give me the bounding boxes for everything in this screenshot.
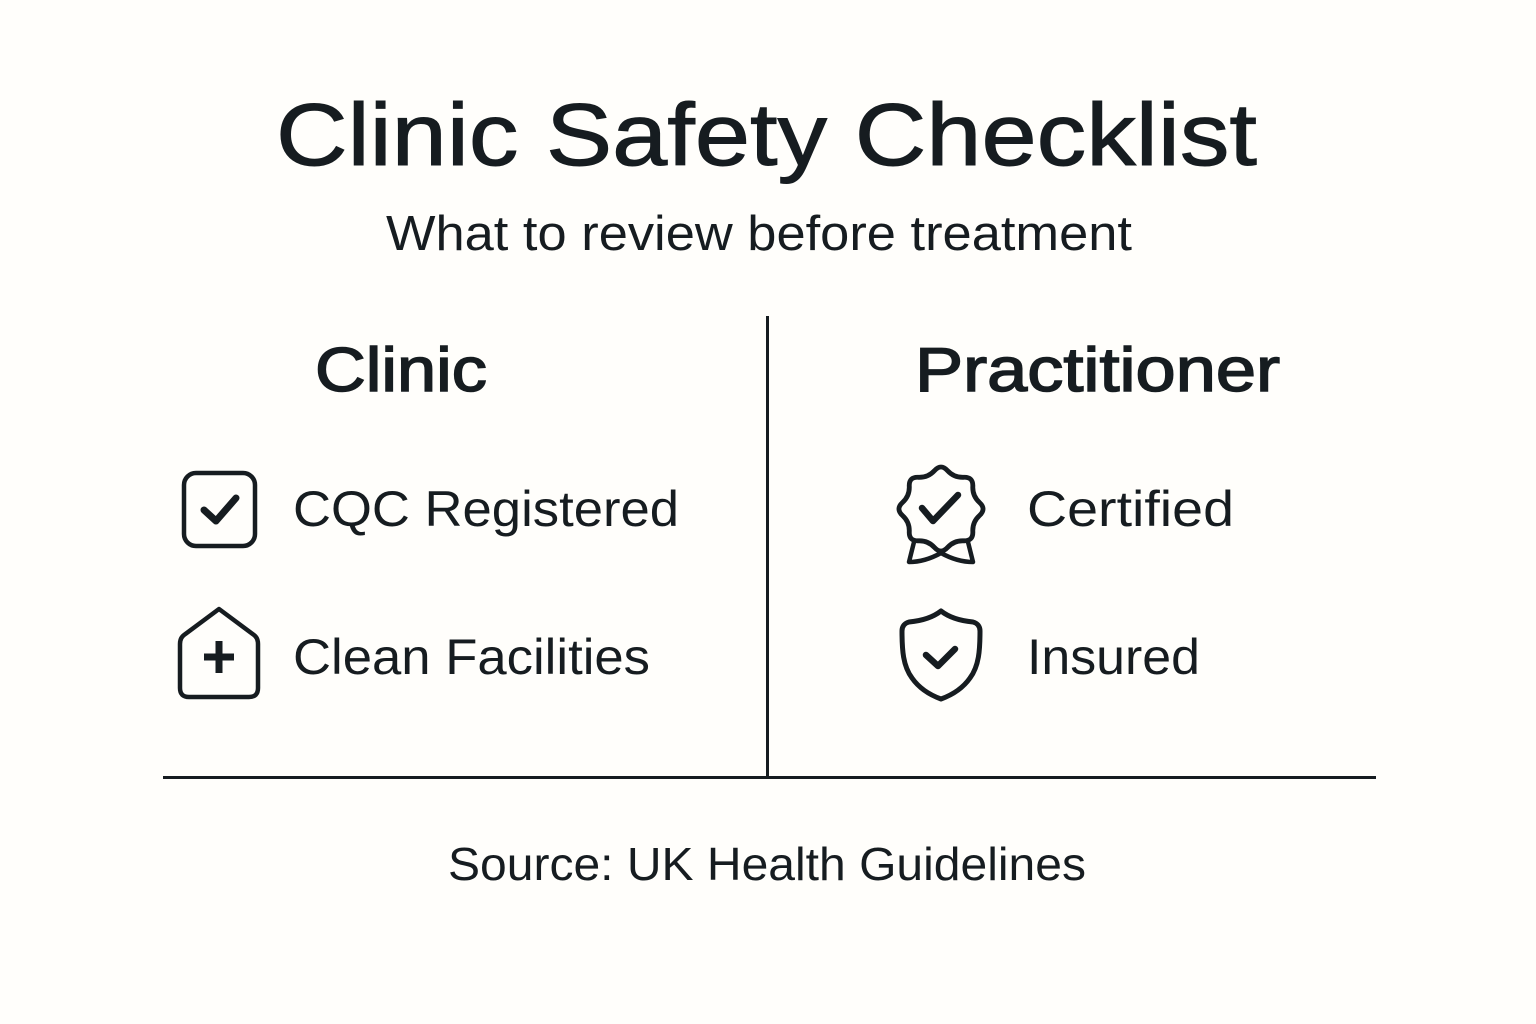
icon: certification rosette [899,467,983,562]
label: CQC Registered: CQC Registered [293,481,679,537]
icon: insurance shield [902,611,980,699]
heading: practitioner: Practitioner [915,336,1280,405]
heading: clinic: Clinic [315,336,487,405]
subtitle: What to review before treatment [386,207,1132,261]
source note: Source: UK Health Guidelines [448,838,1086,890]
label: Clean Facilities: Clean Facilities [293,629,650,685]
label: Certified: Certified [1027,481,1234,537]
icon: checked box [184,473,255,546]
panel: practitioner [899,336,1280,699]
horizontal baseline rule [163,776,1376,779]
label: Insured: Insured [1027,629,1200,685]
icon: clinic house with plus [180,609,258,697]
vertical column divider [766,316,769,778]
panel: clinic [180,336,679,697]
title: Clinic Safety Checklist [276,85,1257,184]
